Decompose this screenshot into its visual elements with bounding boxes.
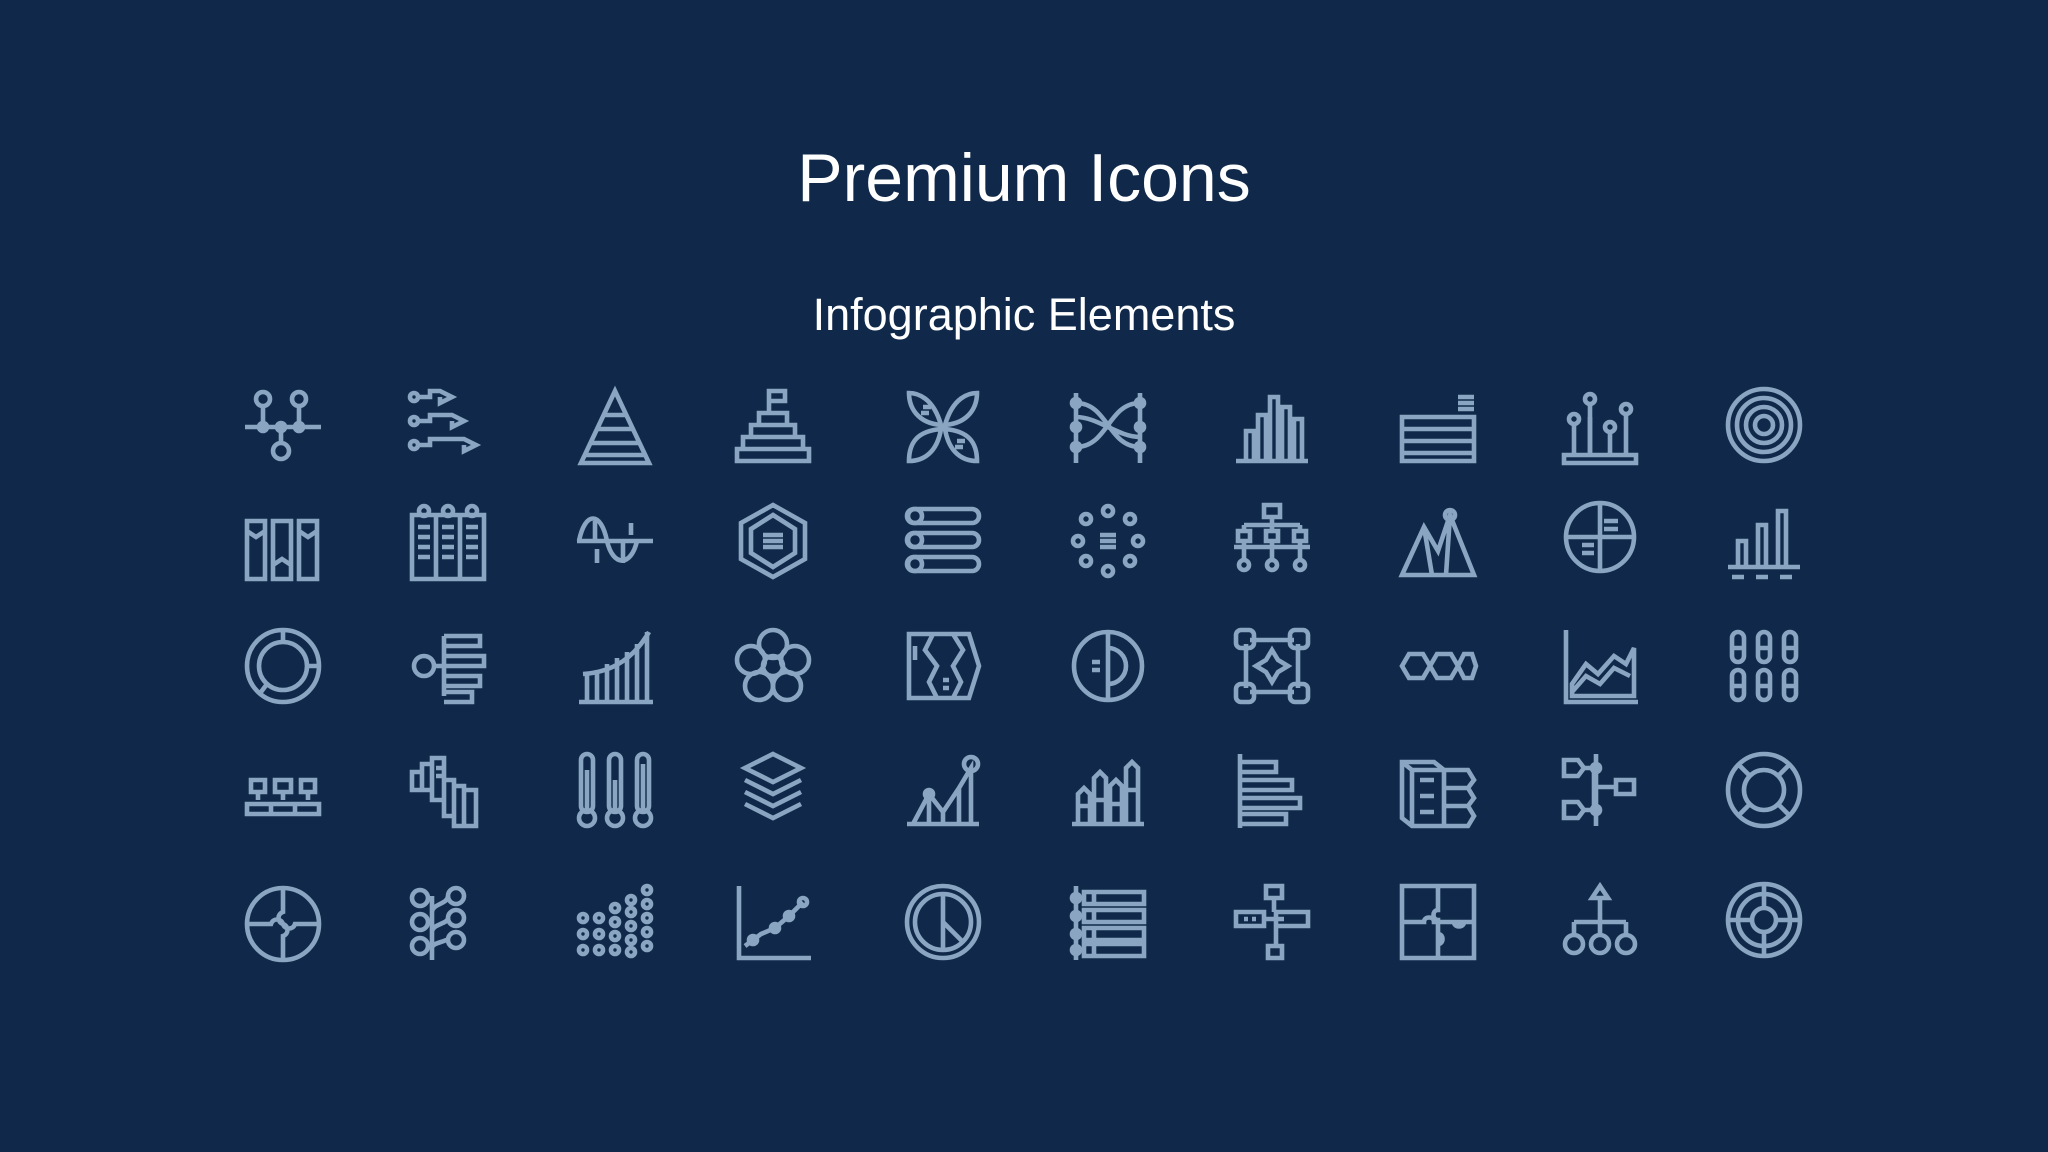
- icon: arrow bars: [1072, 762, 1144, 824]
- icon: pill stacks: [1732, 632, 1796, 700]
- icon: bar dash: [1728, 511, 1800, 577]
- icon: pie quadrants: [1566, 503, 1634, 571]
- icon: line chart dots: [907, 757, 979, 824]
- icon: boxes on bar: [247, 780, 319, 814]
- icon: pie: [907, 886, 979, 958]
- icon: dot matrix: [579, 886, 651, 956]
- icon: network: [245, 392, 321, 459]
- icon: globe puzzle: [247, 888, 319, 960]
- icon: target: [1728, 389, 1800, 461]
- icon: columns: [412, 506, 484, 579]
- icon: line chart: [739, 886, 811, 958]
- icon: butterfly: [909, 393, 977, 461]
- icon: flow tree: [1564, 754, 1634, 826]
- icon: mountains: [1402, 510, 1474, 575]
- icon: hex chain: [1402, 654, 1476, 678]
- icon: horizontal bars: [1240, 754, 1300, 828]
- subtitle: Infographic Elements: [813, 289, 1235, 340]
- icon: thermometers: [579, 754, 651, 826]
- icon: half circle: [1074, 632, 1142, 700]
- icon: puzzle: [1402, 886, 1474, 958]
- icon: hierarchy: [1565, 886, 1635, 953]
- icon: flowchart: [1236, 886, 1308, 958]
- icon: hexagon: [741, 505, 805, 577]
- icon: arrows: [410, 391, 476, 451]
- icon: bookmarks: [247, 521, 317, 579]
- icon: growth bars: [579, 632, 653, 702]
- icon: donut: [247, 630, 319, 702]
- icon: dna: [1072, 393, 1144, 463]
- icon: bar chart: [1236, 397, 1308, 461]
- icon: area chart: [1566, 630, 1638, 702]
- icon: lollipop: [1564, 394, 1636, 463]
- title: Premium Icons: [797, 140, 1251, 216]
- icon: bullet list: [1072, 886, 1144, 960]
- icon: dot ring: [1073, 506, 1143, 576]
- icon: 3d stacked: [1402, 762, 1474, 826]
- icon: step pyramid: [737, 391, 809, 461]
- icon: flower: [737, 630, 809, 700]
- icon: pyramid: [581, 391, 649, 463]
- icon: mind map: [414, 636, 484, 702]
- icon: stepped: [412, 758, 476, 826]
- icon: doc arrows: [909, 634, 979, 698]
- icon: lifebuoy: [1728, 754, 1800, 826]
- icon: branches: [412, 888, 464, 960]
- icon: rounded frame: [1236, 630, 1308, 702]
- icon: stacked bars: [1402, 397, 1474, 461]
- icon: pills: [907, 509, 979, 571]
- icon: sine: [577, 518, 653, 563]
- icon: ring target: [1728, 884, 1800, 956]
- icon: org chart: [1234, 505, 1310, 570]
- icon: layers: [745, 754, 801, 818]
